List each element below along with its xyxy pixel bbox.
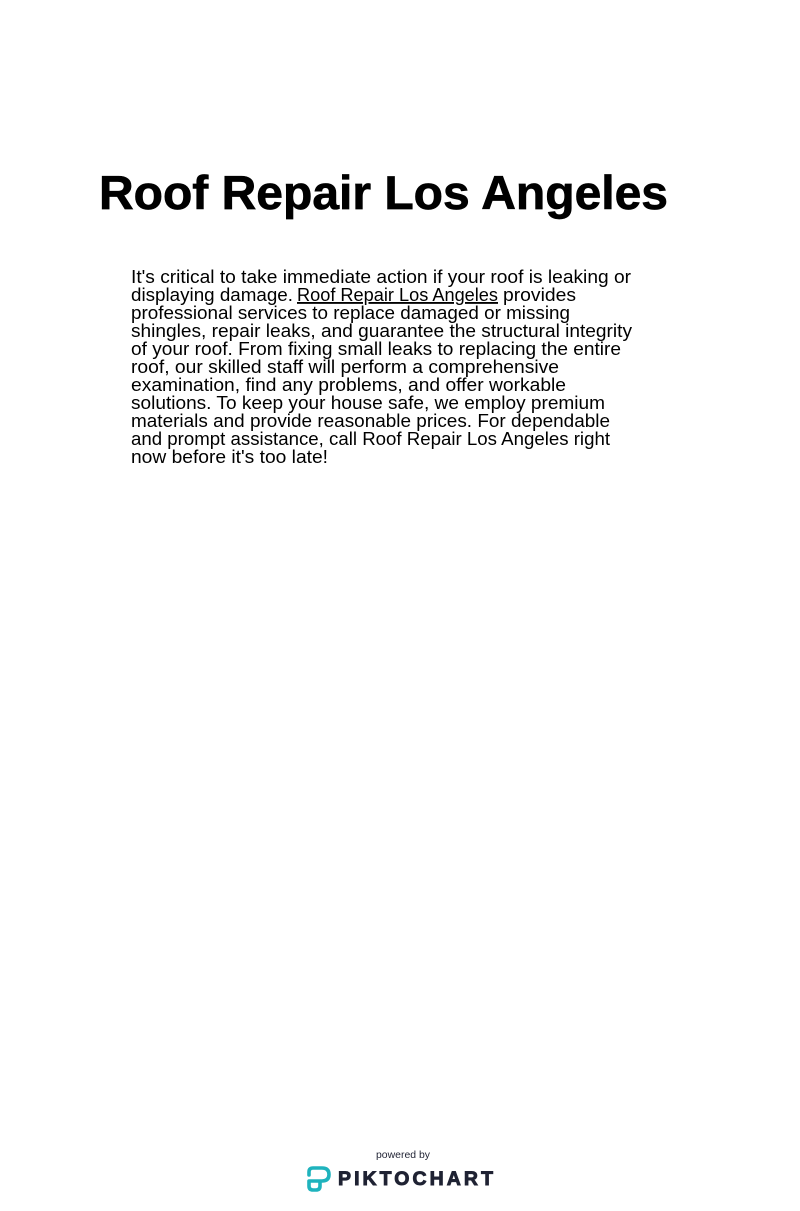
text block: intro paragraph: Roof Repair Los Angeles [297, 284, 498, 305]
powered by label: powered by [376, 1149, 431, 1161]
footer: powered by Piktochart [309, 1149, 493, 1190]
text block: intro paragraph: solutions. To keep your house safe, we employ premium [131, 392, 605, 413]
text block: intro paragraph: provides [503, 284, 576, 305]
text block: intro paragraph: and prompt assistance, call Roof Repair Los Angeles right [131, 428, 610, 449]
text block: intro paragraph: professional services to replace damaged or missing [131, 302, 570, 323]
text block: intro paragraph: materials and provide reasonable prices. For dependable [131, 410, 610, 431]
wordmark: PIKTOCHART [338, 1168, 493, 1190]
text block: intro paragraph: roof, our skilled staff will perform a comprehensive [131, 356, 559, 377]
text block: intro paragraph: of your roof. From fixing small leaks to replacing the entire [131, 338, 621, 359]
text block: intro paragraph: shingles, repair leaks, and guarantee the structural integrity [131, 320, 633, 341]
text block: intro paragraph: examination, find any problems, and offer workable [131, 374, 566, 395]
icon: Piktochart logo mark [309, 1168, 329, 1190]
text block: intro paragraph: displaying damage. [131, 284, 293, 305]
text block: intro paragraph: It's critical to take immediate action if your roof is leaking or [131, 266, 631, 287]
text block: intro paragraph: now before it's too late! [131, 446, 328, 467]
title: Roof Repair Los Angeles [99, 166, 668, 219]
text block: intro paragraph [131, 266, 633, 467]
